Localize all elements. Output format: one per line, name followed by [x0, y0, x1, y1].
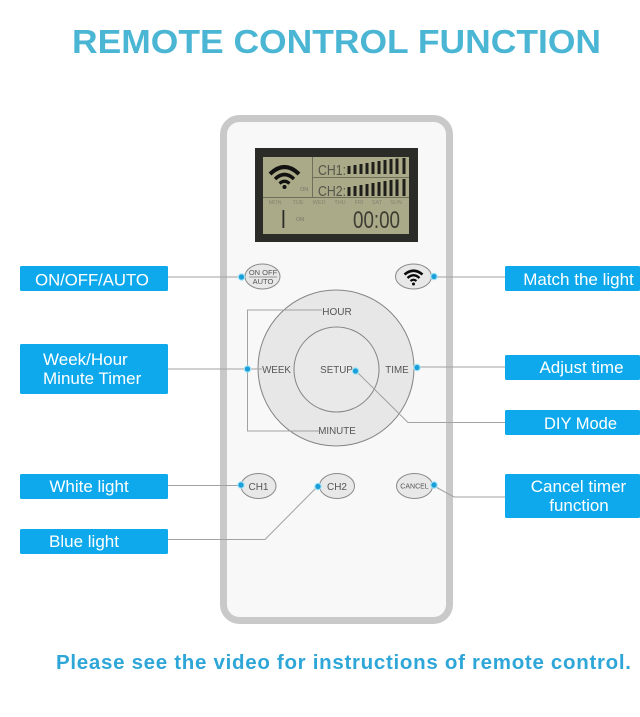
connector lines [168, 277, 505, 540]
wheel control [258, 290, 414, 446]
LCD day digit [282, 210, 284, 228]
button: on off auto [245, 264, 280, 289]
LCD channel two bars [349, 179, 404, 196]
button: cancel [396, 474, 432, 498]
footer note: Please see the video for instructions of remote control. [56, 651, 631, 674]
LCD on marker top: ON [300, 187, 308, 193]
wheel control: HOUR [322, 307, 352, 318]
LCD channel one label: CH1: [318, 163, 346, 179]
wheel control: SETUP [320, 365, 353, 376]
LCD weekdays: WED [313, 200, 325, 206]
label: adjust time: Adjust time [539, 358, 624, 377]
label: blue light: Blue light [49, 532, 119, 551]
button: CH1 [241, 474, 276, 498]
label: week hour minute timer [20, 344, 168, 394]
panel: LCD display [255, 148, 418, 242]
LCD weekdays: THU [334, 200, 346, 206]
icon: LCD signal [270, 167, 299, 189]
label: white light [20, 474, 168, 499]
button: CH1: CH1 [248, 482, 269, 493]
wheel control: WEEK [262, 365, 291, 376]
button: match signal [396, 264, 432, 289]
title: REMOTE CONTROL FUNCTION [72, 23, 601, 60]
button: on off auto: ON OFF [249, 268, 278, 277]
label: week hour minute timer: Minute Timer [43, 369, 142, 388]
LCD channel one bars [349, 158, 404, 174]
label: blue light [20, 529, 168, 554]
LCD channel two label: CH2: [318, 184, 346, 200]
label: cancel timer function: Cancel timer [531, 477, 627, 496]
LCD weekdays [269, 200, 402, 206]
label: match the light [505, 266, 640, 291]
button: CH2: CH2 [327, 482, 347, 493]
LCD on marker bottom: ON [296, 217, 304, 223]
wheel control: MINUTE [318, 426, 356, 437]
label: diy mode: DIY Mode [544, 415, 617, 433]
label: on off auto: ON/OFF/AUTO [35, 270, 149, 290]
LCD weekdays: TUE [292, 200, 304, 206]
connector dots [238, 273, 437, 490]
label: on off auto [20, 266, 168, 291]
wheel control: TIME [385, 365, 409, 376]
label: match the light: Match the light [523, 270, 634, 289]
label: week hour minute timer: Week/Hour [43, 350, 128, 369]
LCD weekdays: SAT [372, 200, 383, 206]
button: CH2 [320, 474, 354, 498]
label: cancel timer function: function [549, 496, 609, 515]
LCD clock: 00:00 [353, 207, 400, 234]
button: on off auto: AUTO [253, 277, 274, 286]
label: diy mode [505, 410, 640, 435]
label: adjust time [505, 355, 640, 380]
LCD weekdays: MON [269, 200, 281, 206]
panel: remote control body [224, 118, 450, 620]
button: cancel: CANCEL [400, 484, 429, 490]
label: cancel timer function [505, 474, 640, 518]
LCD weekdays: SUN [390, 200, 402, 206]
LCD weekdays: FRI [355, 200, 364, 206]
label: white light: White light [49, 477, 129, 496]
